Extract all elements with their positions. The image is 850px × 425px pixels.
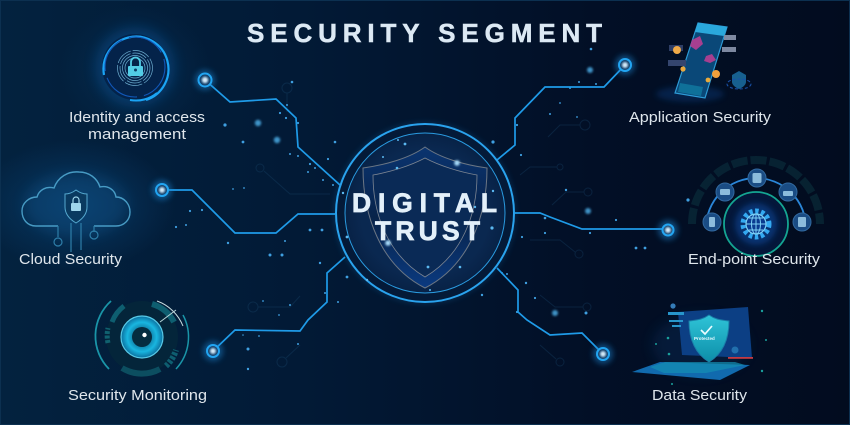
connector: end-point security xyxy=(515,213,678,240)
label: application security: Application Security xyxy=(629,110,772,126)
faint background circuit traces xyxy=(248,83,592,367)
connector: security monitoring xyxy=(203,257,345,361)
shield xyxy=(363,147,487,288)
label: identity and access management: management xyxy=(88,127,186,143)
connector: cloud security xyxy=(152,180,335,233)
icon: fingerprint lock xyxy=(95,27,175,107)
icon: laptop with protected shield xyxy=(632,303,767,385)
connector: identity and access management xyxy=(195,70,340,185)
label: cloud security: Cloud Security xyxy=(19,252,123,268)
larger glowing particles xyxy=(255,67,593,316)
icon: cloud with shield xyxy=(22,172,130,252)
center text: DIGITAL xyxy=(352,188,497,218)
center text: TRUST xyxy=(375,216,480,246)
label: end-point security: End-point Security xyxy=(688,252,821,268)
label: security monitoring: Security Monitoring xyxy=(68,388,207,404)
label: data security: Data Security xyxy=(652,388,748,404)
scattered glowing particles xyxy=(175,48,690,370)
icon: monitoring eye xyxy=(95,301,189,374)
icon: laptop with protected shield: Protected xyxy=(694,336,715,341)
center particles xyxy=(342,139,494,291)
label: identity and access management xyxy=(69,110,205,143)
connector: data security xyxy=(497,268,613,364)
title: SECURITY SEGMENT xyxy=(247,18,602,48)
center text xyxy=(352,188,497,246)
central digital trust emblem xyxy=(334,122,516,304)
connector: application security xyxy=(497,55,635,160)
icon: application phone xyxy=(656,23,751,102)
label: identity and access management: Identity and access xyxy=(69,110,205,126)
icon: end-point gear hub xyxy=(692,160,820,256)
